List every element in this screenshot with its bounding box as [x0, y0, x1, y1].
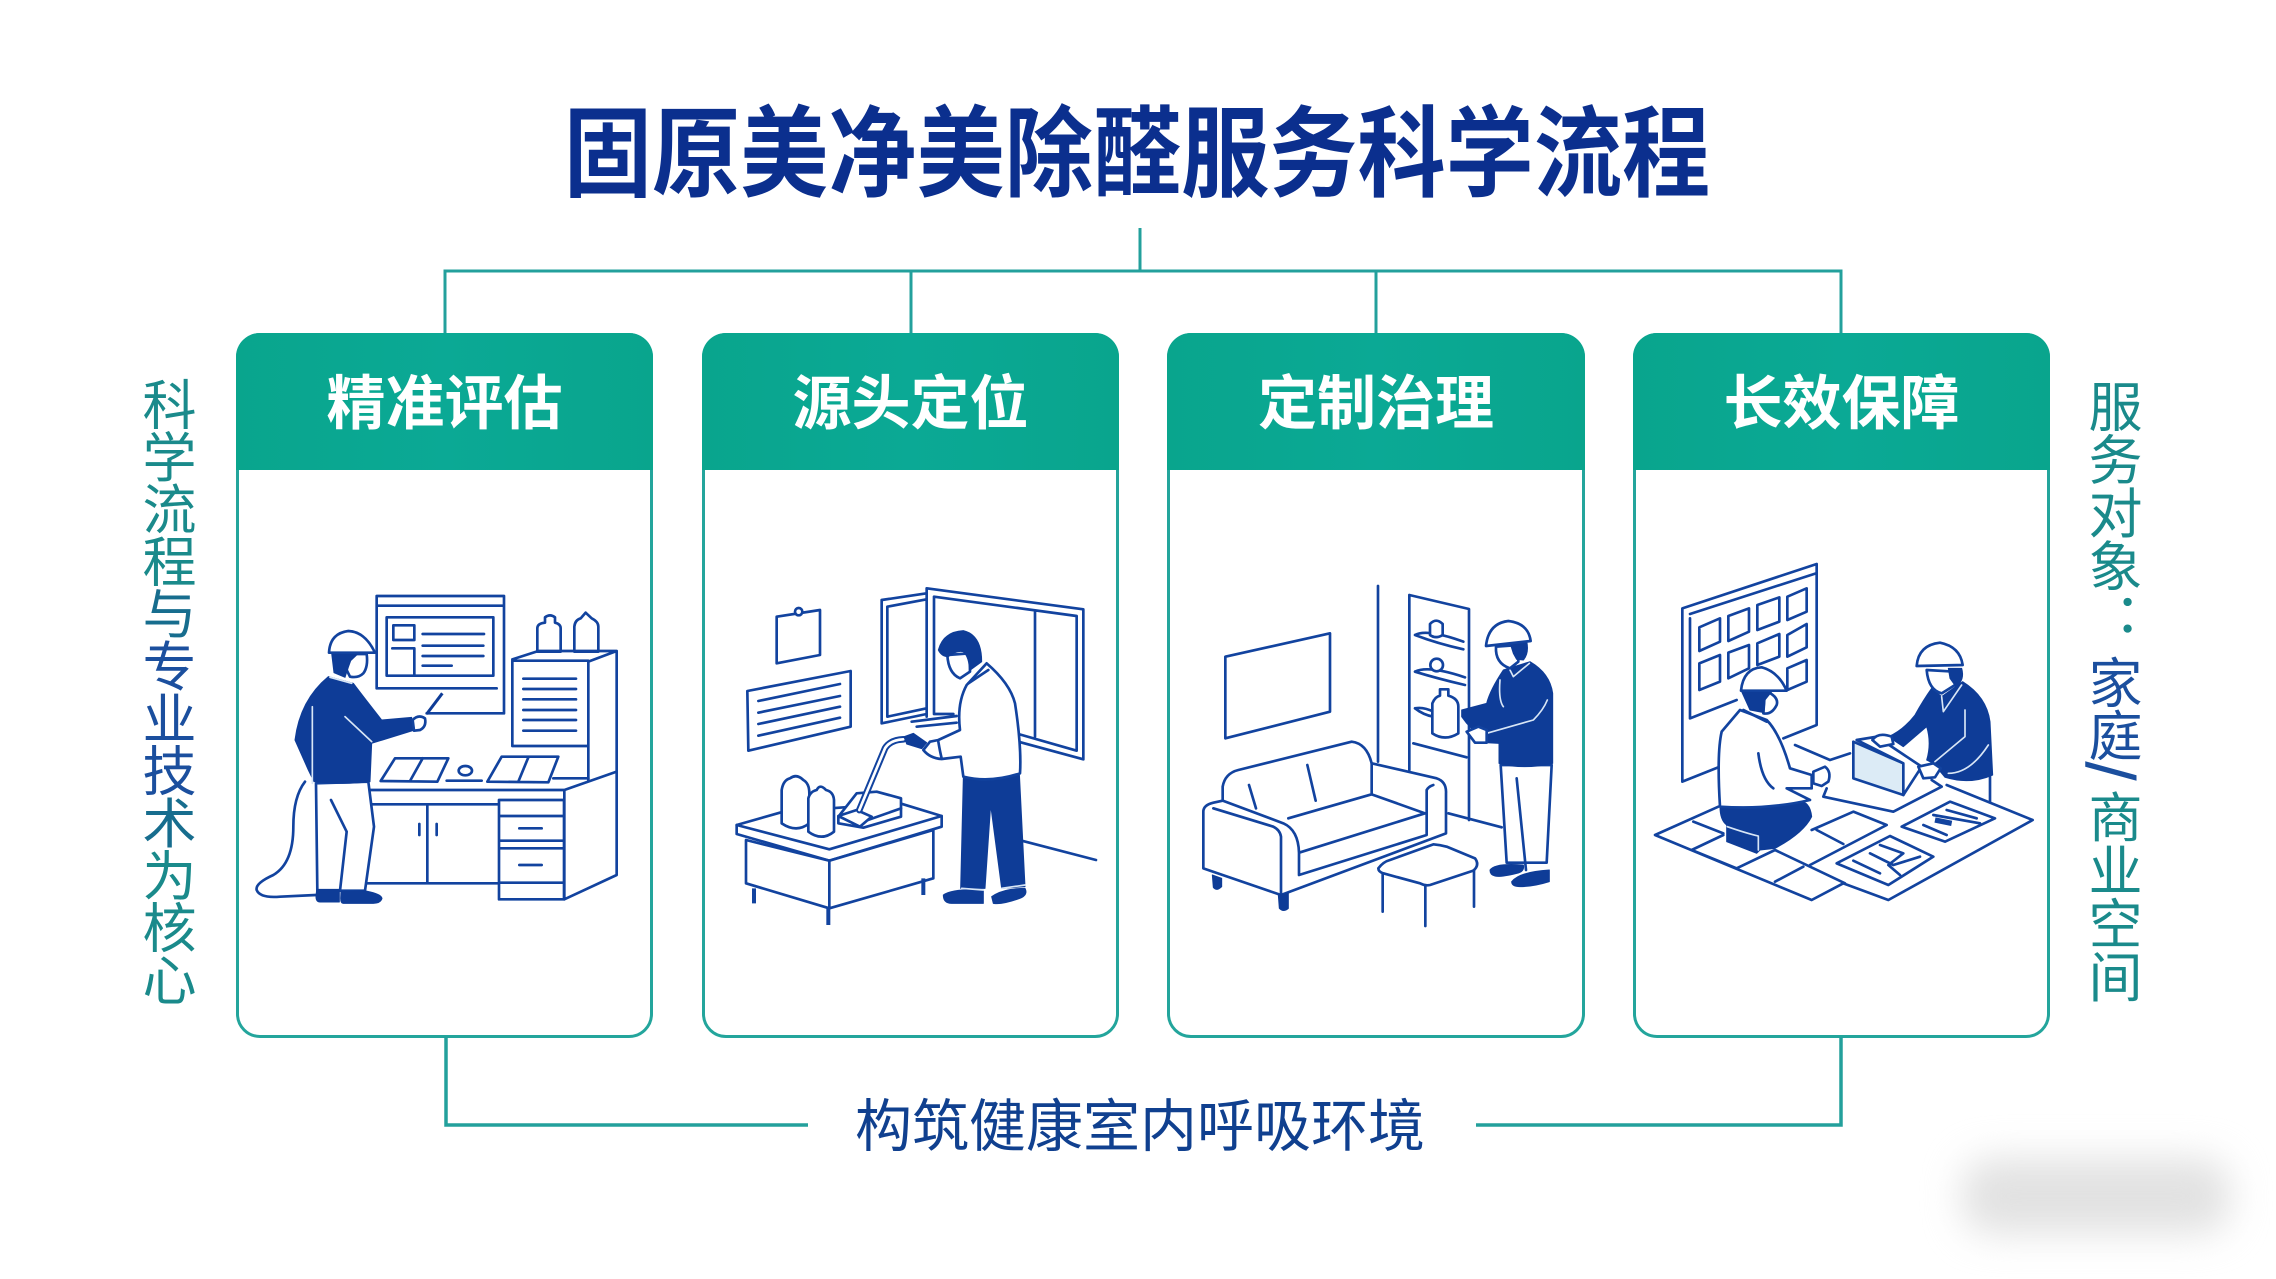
window [882, 588, 1083, 759]
illustration: engineer pointing at monitor beside workbench [255, 594, 618, 904]
right vertical caption: 服务对象 ： 家庭 / 商业空间 [2071, 379, 2149, 1002]
worker in hard hat [295, 631, 442, 903]
left vertical caption: 科学流程 与 专业技 术 为核心 [134, 377, 194, 1005]
illustration: worker treating a table by the window [735, 587, 1098, 925]
bottom bracket connector [444, 1038, 1843, 1127]
hose [257, 782, 316, 897]
books and wand [838, 733, 927, 828]
bottles on cabinet [537, 613, 598, 652]
heading: 长效保障 [1633, 333, 2050, 470]
heading: 精准评估 [236, 333, 653, 470]
table [737, 803, 942, 925]
panel: 定制治理 [1167, 333, 1585, 1038]
panel: 源头定位 [702, 333, 1119, 1038]
connector tree from title to the four cards [444, 228, 1842, 333]
heading: 定制治理: 定制治理 [1258, 371, 1494, 437]
right worker [1888, 643, 1993, 802]
worker [923, 631, 1026, 904]
blurred smudge bottom right [1962, 1158, 2230, 1234]
bottom caption: 构筑健康室内呼吸环境 [855, 1095, 1425, 1159]
panel: 精准评估 [236, 333, 653, 1038]
wall board with panels [1682, 564, 1817, 782]
title: 固原美净美除醛服务科学流程 [564, 99, 1710, 210]
monitor [377, 596, 504, 713]
illustration: two workers reviewing plans on the floor [1654, 562, 2034, 902]
heading: 定制治理 [1167, 333, 1585, 470]
heading: 精准评估: 精准评估 [326, 371, 562, 437]
wall picture [1225, 633, 1330, 738]
heading: 长效保障: 长效保障 [1723, 371, 1960, 437]
heading: 源头定位 [702, 333, 1119, 470]
heading: 源头定位: 源头定位 [792, 371, 1028, 437]
wall corner and shelf unit [1378, 586, 1502, 827]
panel: 长效保障 [1633, 333, 2050, 1038]
floor line [1022, 841, 1096, 860]
worker holding bottle [1432, 621, 1553, 887]
shelf objects [1413, 621, 1467, 757]
illustration: worker in living room with shelves and sofa [1202, 584, 1554, 928]
floor plan sheets [1655, 745, 2033, 900]
left worker seated [1719, 667, 1829, 853]
side stool [1378, 844, 1477, 926]
note on wall [777, 608, 820, 663]
wall vent [747, 671, 851, 751]
sofa [1203, 742, 1446, 910]
workbench with drawers [367, 757, 617, 899]
filing cabinet [512, 651, 617, 780]
laptop [1853, 735, 1941, 795]
chemical bottles [782, 776, 834, 837]
